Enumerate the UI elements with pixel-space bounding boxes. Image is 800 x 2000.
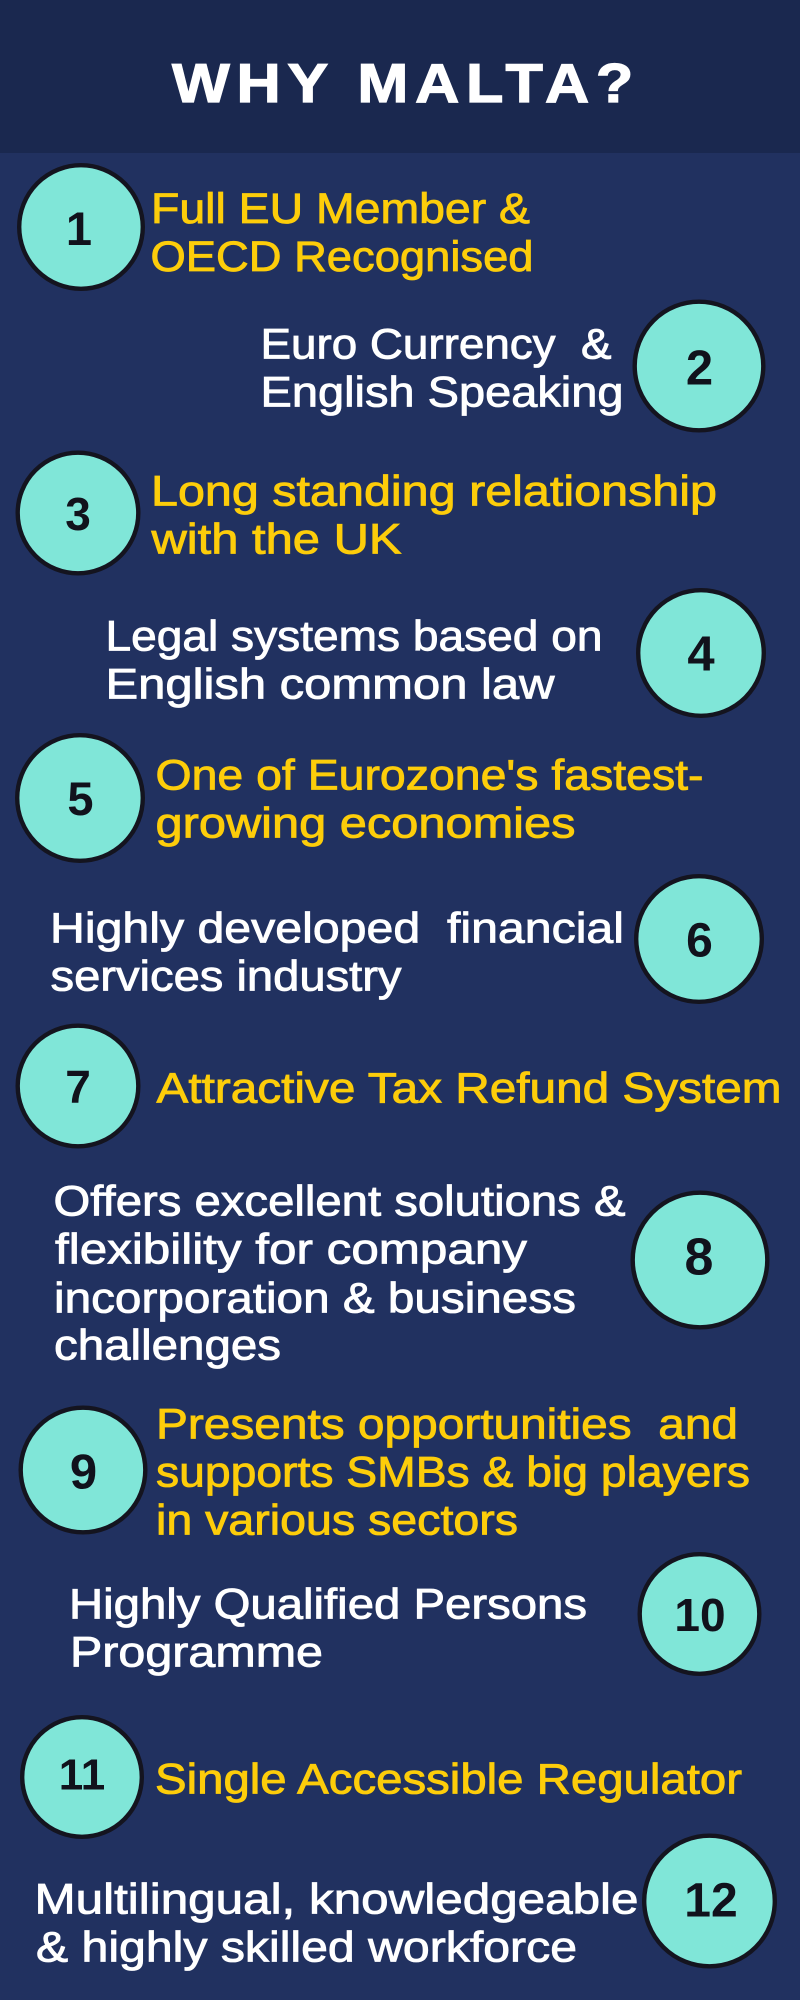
text: Euro Currency & English Speaking xyxy=(260,320,624,416)
title banner xyxy=(0,0,800,153)
number badge 8: 8 xyxy=(685,1228,713,1286)
number badge 5: 5 xyxy=(67,772,94,825)
number badge 3 xyxy=(18,453,138,573)
item 10 xyxy=(69,1554,759,1676)
number badge 6: 6 xyxy=(686,914,713,968)
text: Offers excellent solutions & flexibility for company incorporation & business challenges: incorporation & business xyxy=(54,1274,576,1322)
item 8 xyxy=(54,1178,767,1370)
number badge 9 xyxy=(21,1408,145,1532)
number badge 10: 10 xyxy=(674,1589,726,1641)
text: Multilingual, knowledgeable & highly skilled workforce: & highly skilled workforce xyxy=(36,1924,577,1972)
text: Offers excellent solutions & flexibility for company incorporation & business challenges: Offers excellent solutions & xyxy=(54,1178,626,1226)
text: Offers excellent solutions & flexibility for company incorporation & business challenges: challenges xyxy=(54,1322,281,1370)
item 7 xyxy=(18,1026,781,1146)
number badge 3: 3 xyxy=(65,488,91,540)
text: Presents opportunities and supports SMBs & big players in various sectors: supports SMBs & big players xyxy=(156,1448,750,1496)
number badge 7 xyxy=(18,1026,138,1146)
text: Long standing relationship with the UK: Long standing relationship xyxy=(151,468,717,516)
text: Presents opportunities and supports SMBs & big players in various sectors: in various sectors xyxy=(156,1496,518,1544)
number badge 12: 12 xyxy=(684,1874,738,1928)
text: Multilingual, knowledgeable & highly skilled workforce: Multilingual, knowledgeable xyxy=(34,1876,638,1924)
text: Attractive Tax Refund System: Attractive Tax Refund System xyxy=(156,1064,782,1112)
text: Highly developed financial services industry xyxy=(50,904,624,1000)
number badge 4: 4 xyxy=(687,628,715,682)
text: Highly developed financial services industry: Highly developed financial xyxy=(50,904,624,952)
text: Legal systems based on English common law xyxy=(106,612,602,708)
text: Euro Currency & English Speaking: English Speaking xyxy=(260,368,624,416)
number badge 5 xyxy=(17,735,143,861)
text: Full EU Member & OECD Recognised xyxy=(150,185,534,281)
item 9 xyxy=(21,1400,750,1544)
text: Highly Qualified Persons Programme: Highly Qualified Persons xyxy=(69,1580,587,1628)
item 2 xyxy=(260,302,763,430)
text: Presents opportunities and supports SMBs & big players in various sectors xyxy=(156,1400,750,1544)
number badge 10 xyxy=(640,1554,759,1674)
title: WHY MALTA? xyxy=(172,52,640,114)
text: One of Eurozone's fastest-growing economies: One of Eurozone's fastest- xyxy=(156,752,704,800)
text: Legal systems based on English common law: English common law xyxy=(106,660,556,708)
text: Full EU Member & OECD Recognised: OECD Recognised xyxy=(150,233,534,281)
number badge 1: 1 xyxy=(66,202,92,255)
text: Legal systems based on English common law: Legal systems based on xyxy=(106,612,602,660)
number badge 6 xyxy=(636,876,762,1002)
number badge 1 xyxy=(19,165,143,289)
number badge 11 xyxy=(22,1717,142,1837)
text: Full EU Member & OECD Recognised: Full EU Member & xyxy=(151,185,530,233)
number badge 7: 7 xyxy=(65,1060,91,1112)
text: Long standing relationship with the UK: with the UK xyxy=(150,516,402,564)
text: Offers excellent solutions & flexibility for company incorporation & business challenges: flexibility for company xyxy=(55,1226,528,1274)
number badge 4 xyxy=(638,590,764,716)
text: Highly Qualified Persons Programme: Programme xyxy=(70,1628,323,1676)
text: One of Eurozone's fastest-growing economies: growing economies xyxy=(156,800,576,848)
item 6 xyxy=(50,876,762,1002)
text: Highly Qualified Persons Programme xyxy=(69,1580,587,1676)
item 1 xyxy=(19,165,533,289)
text: Euro Currency & English Speaking: Euro Currency & xyxy=(260,320,612,368)
text: Offers excellent solutions & flexibility for company incorporation & business challenges xyxy=(54,1178,626,1370)
number badge 8 xyxy=(633,1193,767,1327)
item 11 xyxy=(22,1717,742,1837)
item 5 xyxy=(17,735,703,861)
number badge 12 xyxy=(644,1836,775,1966)
number badge 2 xyxy=(635,302,763,430)
number badge 9: 9 xyxy=(70,1446,97,1500)
number badge 2: 2 xyxy=(686,342,713,396)
item 12 xyxy=(34,1836,775,1972)
text: One of Eurozone's fastest-growing economies xyxy=(156,752,704,848)
text: Presents opportunities and supports SMBs & big players in various sectors: Presents opportunities and xyxy=(156,1400,738,1448)
item 4 xyxy=(106,590,764,716)
item 3 xyxy=(18,453,717,573)
text: Single Accessible Regulator: Single Accessible Regulator xyxy=(155,1756,742,1804)
text: Highly developed financial services industry: services industry xyxy=(50,952,402,1000)
number badge 11: 11 xyxy=(59,1750,105,1800)
text: Long standing relationship with the UK xyxy=(150,468,717,564)
text: Multilingual, knowledgeable & highly skilled workforce xyxy=(34,1876,638,1972)
